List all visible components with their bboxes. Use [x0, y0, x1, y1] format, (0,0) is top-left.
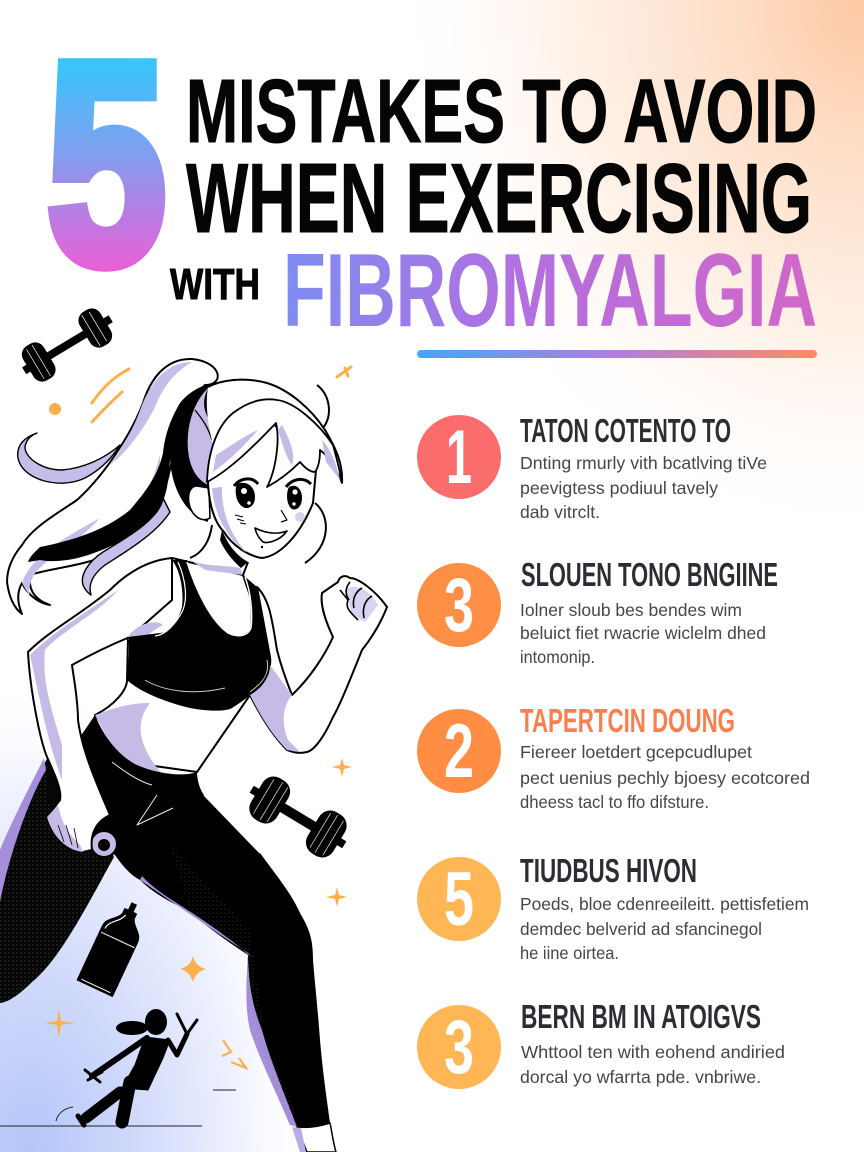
body 4: he iine oirtea. — [520, 943, 619, 963]
body 3: dheess tacl to ffo difsture. — [520, 792, 709, 812]
right eye — [286, 479, 311, 510]
hair wisp — [18, 433, 120, 483]
heading 1: TATON COTENTO TO — [520, 412, 731, 449]
title word: with: WITH — [170, 260, 260, 309]
icon: orange sparkles — [45, 758, 352, 1038]
heading 5: BERN BM IN ATOIGVS — [521, 998, 761, 1035]
body 1: Dnting rmurly vith bcatlving tiVe — [520, 453, 767, 473]
torso — [95, 558, 272, 772]
badge 3 — [417, 563, 501, 648]
badge 3 second — [417, 1005, 501, 1090]
body 5: Whttool ten with eohend andiried — [521, 1042, 785, 1062]
mistake 4 — [417, 852, 809, 963]
left eye — [234, 479, 258, 508]
foam roller in hand — [88, 826, 117, 857]
mistake 5 — [417, 998, 785, 1090]
icon: water bottle — [78, 895, 152, 996]
badge 1 — [417, 415, 501, 500]
front leg leggings — [78, 715, 330, 1127]
body 1 — [520, 453, 767, 522]
icon: orange motion chevrons — [222, 1040, 246, 1068]
badge 3 second: 3 — [444, 1005, 474, 1090]
heading 4: TIUDBUS HIVON — [520, 852, 697, 889]
badge 3: 3 — [444, 563, 474, 648]
badge 5: 5 — [444, 857, 474, 942]
decorative orange accents — [49, 367, 351, 422]
mistake 3 — [417, 702, 810, 812]
mistake list — [417, 412, 810, 1090]
big gradient number 5: 5 — [47, 3, 166, 323]
body 1: dab vitrclt. — [520, 502, 600, 522]
second lock — [82, 498, 170, 595]
back leg — [0, 757, 114, 1003]
body 4: Poeds, bloe cdenreeileitt. pettisfetiem — [520, 894, 809, 914]
body 4 — [520, 894, 809, 963]
gradient rule under title — [417, 350, 817, 358]
badge 1: 1 — [446, 415, 472, 500]
heading 3: TAPERTCIN DOUNG — [520, 702, 735, 739]
waist shadow — [95, 703, 163, 775]
ground line and motion strokes — [0, 1090, 236, 1126]
body 4: demdec belverid ad sfancinegol — [520, 919, 762, 939]
mistake 2 — [417, 556, 778, 667]
face — [208, 420, 316, 558]
rear arm and hand — [28, 558, 172, 852]
sports bra — [127, 560, 271, 711]
body 5: dorcal yo wfarrta pde. vnbriwe. — [520, 1067, 761, 1087]
body 2: beluict fiet rwacrie wiclelm dhed — [520, 623, 766, 643]
body 3 — [520, 742, 810, 812]
neck — [190, 525, 248, 575]
hair crown — [207, 380, 342, 483]
smile — [255, 528, 287, 543]
title — [47, 3, 817, 349]
black hair lock — [28, 382, 217, 562]
body 2: intomonip. — [520, 647, 595, 667]
body 3: pect uenius pechly bjoesy ecotcored — [520, 768, 810, 788]
back of head — [170, 383, 240, 522]
body 3: Fiereer loetdert gcepcudlupet — [520, 742, 752, 762]
icon: small runner silhouette — [78, 1009, 197, 1125]
character: running woman — [0, 359, 387, 1152]
body 2: Iolner sloub bes bendes wim — [520, 600, 742, 620]
badge 2: 2 — [444, 709, 474, 794]
body 2 — [520, 600, 766, 667]
ponytail — [7, 359, 218, 614]
icon: lower dumbbell — [239, 769, 357, 865]
body 1: peevigtess podiuul tavely — [520, 478, 718, 498]
mistake 1 — [417, 412, 767, 522]
front arm and fist — [250, 576, 387, 753]
badge 2 — [417, 709, 501, 794]
badge 5 — [417, 857, 501, 942]
body 5 — [520, 1042, 785, 1087]
front hair and bangs — [207, 385, 342, 563]
lower leg skin — [297, 1123, 336, 1152]
ear — [188, 486, 210, 520]
icon: top dumbbell — [14, 302, 121, 388]
